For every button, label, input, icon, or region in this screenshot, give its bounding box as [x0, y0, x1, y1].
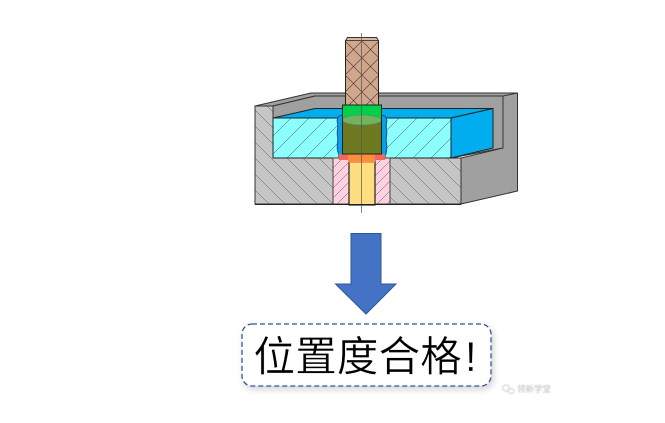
center line — [360, 33, 362, 213]
blue adhesive around bore — [337, 115, 387, 158]
pink bushing right — [375, 158, 390, 204]
translucent ellipse — [342, 115, 382, 125]
red collar — [339, 154, 385, 160]
blue insert top surface — [273, 108, 493, 118]
cyan section right — [385, 118, 451, 158]
housing front section — [255, 106, 333, 204]
technical drawing: stud in housing — [255, 33, 518, 213]
housing back and right faces — [255, 93, 518, 204]
pink bushing left — [333, 158, 349, 204]
olive sleeve body — [342, 120, 382, 154]
watermark icon — [502, 385, 514, 394]
housing front section right — [390, 158, 461, 204]
watermark text: 领新学堂 — [517, 384, 551, 394]
threaded stud shaft — [346, 38, 378, 105]
callout box — [242, 324, 491, 386]
callout text: 位置度合格! — [254, 333, 477, 380]
stud chamfer — [346, 38, 378, 40]
arrow: down — [336, 234, 396, 314]
sleeve outline — [342, 105, 382, 154]
blue insert right face — [451, 108, 493, 158]
bottom edge — [255, 204, 461, 206]
watermark — [502, 384, 551, 394]
cyan section left — [273, 118, 339, 158]
yellow pin — [349, 162, 375, 205]
orange collar — [348, 154, 375, 162]
callout: result — [242, 324, 491, 386]
green sleeve — [342, 105, 382, 125]
